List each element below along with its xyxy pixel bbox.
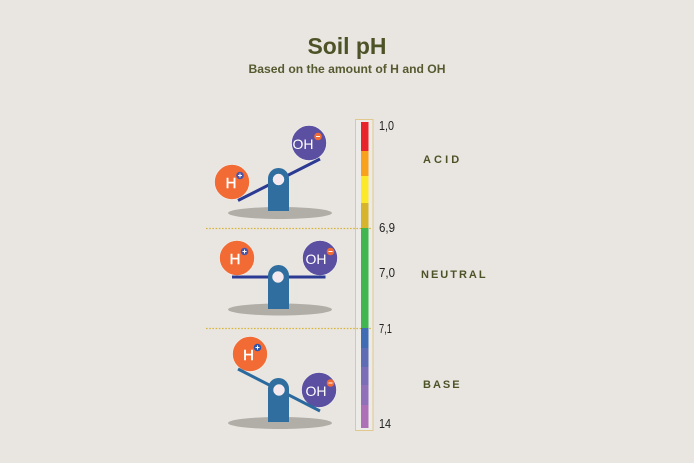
scale values: 6,9 (379, 221, 395, 235)
seesaw: acid: OH (292, 136, 314, 152)
pH scale bar (361, 122, 368, 428)
scale values: 7,1 (379, 322, 392, 336)
seesaw: neutral: H (230, 251, 240, 268)
label: base: BASE (423, 379, 462, 391)
seesaw: base: H (243, 347, 254, 364)
seesaw: acid: H (226, 175, 236, 192)
seesaw: base (228, 336, 336, 429)
divider lines (206, 228, 372, 328)
scale values: 7,0 (379, 266, 395, 280)
seesaw: neutral (220, 240, 338, 316)
scale values: 1,0 (379, 119, 394, 133)
seesaw: acid (214, 126, 332, 219)
seesaw: neutral: OH (306, 251, 326, 267)
seesaw: base: OH (306, 383, 326, 399)
label: acid: ACID (423, 154, 462, 166)
scale values: 14 (379, 417, 391, 431)
scale values (379, 119, 395, 431)
title: Soil pH (308, 33, 386, 59)
label: neutral: NEUTRAL (421, 269, 488, 281)
pH scale frame (356, 120, 373, 430)
subtitle: Based on the amount of H and OH (248, 64, 446, 76)
